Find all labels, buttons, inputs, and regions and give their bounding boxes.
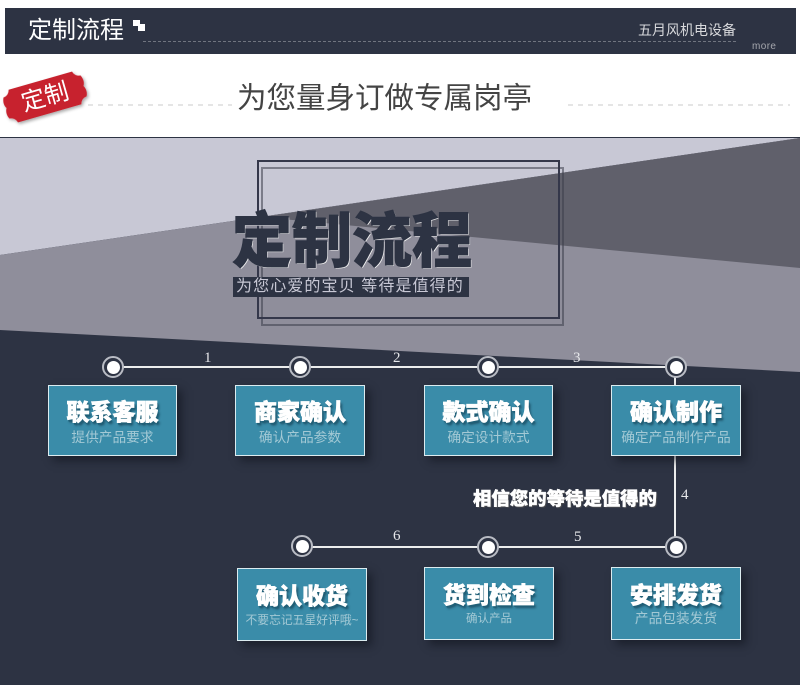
node 1 (102, 356, 124, 378)
subheading: 为您量身订做专属岗亭 (237, 82, 532, 115)
card: 联系客服: 联系客服 (66, 399, 158, 425)
card: 商家确认: 商家确认 (254, 399, 346, 425)
header bar (5, 8, 796, 54)
header title: 定制流程 (28, 17, 124, 44)
node 6 (477, 536, 499, 558)
card: 确认收货: 确认收货 (256, 583, 348, 609)
badge: red tag: 定制 (18, 78, 72, 117)
card: 商家确认: 确认产品参数 (259, 430, 341, 445)
badge: red tag (2, 72, 90, 126)
connector: top row line (113, 366, 676, 368)
card: 确认制作 (611, 385, 741, 456)
step number 2: 2 (393, 350, 400, 366)
card: 货到检查: 确认产品 (466, 613, 512, 625)
card: 款式确认: 确定设计款式 (447, 430, 530, 445)
card: 确认收货: 不要忘记五星好评哦~ (245, 613, 359, 627)
card: 联系客服: 提供产品要求 (71, 430, 154, 445)
icon: header squares (133, 20, 145, 31)
panel: process background (0, 137, 800, 685)
card: 款式确认: 款式确认 (442, 399, 534, 425)
frame: back outline (261, 167, 564, 326)
card: 安排发货: 产品包装发货 (635, 611, 717, 626)
subtitle strip (233, 277, 469, 297)
node 3 (477, 356, 499, 378)
node 2 (289, 356, 311, 378)
card: 确认制作: 确定产品制作产品 (621, 430, 731, 445)
header dashed rule (143, 41, 736, 42)
card: 安排发货: 安排发货 (630, 582, 722, 608)
connector: bottom row line (302, 546, 676, 548)
card: 货到检查 (424, 567, 554, 640)
step number 4: 4 (681, 487, 688, 503)
card: 商家确认 (235, 385, 365, 456)
node 5 (665, 536, 687, 558)
left dashed rule (88, 104, 232, 106)
step number 3: 3 (573, 350, 580, 366)
step number 6: 6 (393, 528, 400, 544)
connector: right vertical line (674, 367, 676, 547)
node 7 (291, 535, 313, 557)
frame: front outline (257, 160, 560, 319)
subtitle text: 为您心爱的宝贝 等待是值得的 (236, 278, 464, 295)
node 4 (665, 356, 687, 378)
background polygons (0, 138, 800, 372)
card: 货到检查: 货到检查 (443, 582, 535, 608)
header more link: more (752, 41, 776, 52)
main title: 定制流程 (232, 208, 472, 275)
right dashed rule (568, 104, 790, 106)
header brand name: 五月风机电设备 (638, 22, 736, 38)
step number 5: 5 (574, 529, 582, 545)
card: 款式确认 (424, 385, 553, 456)
callout: 相信您的等待是值得的 (473, 488, 657, 509)
card: 联系客服 (48, 385, 177, 456)
card: 安排发货 (611, 567, 741, 640)
card: 确认收货 (237, 568, 367, 641)
card: 确认制作: 确认制作 (630, 399, 722, 425)
step number 1: 1 (204, 350, 212, 366)
